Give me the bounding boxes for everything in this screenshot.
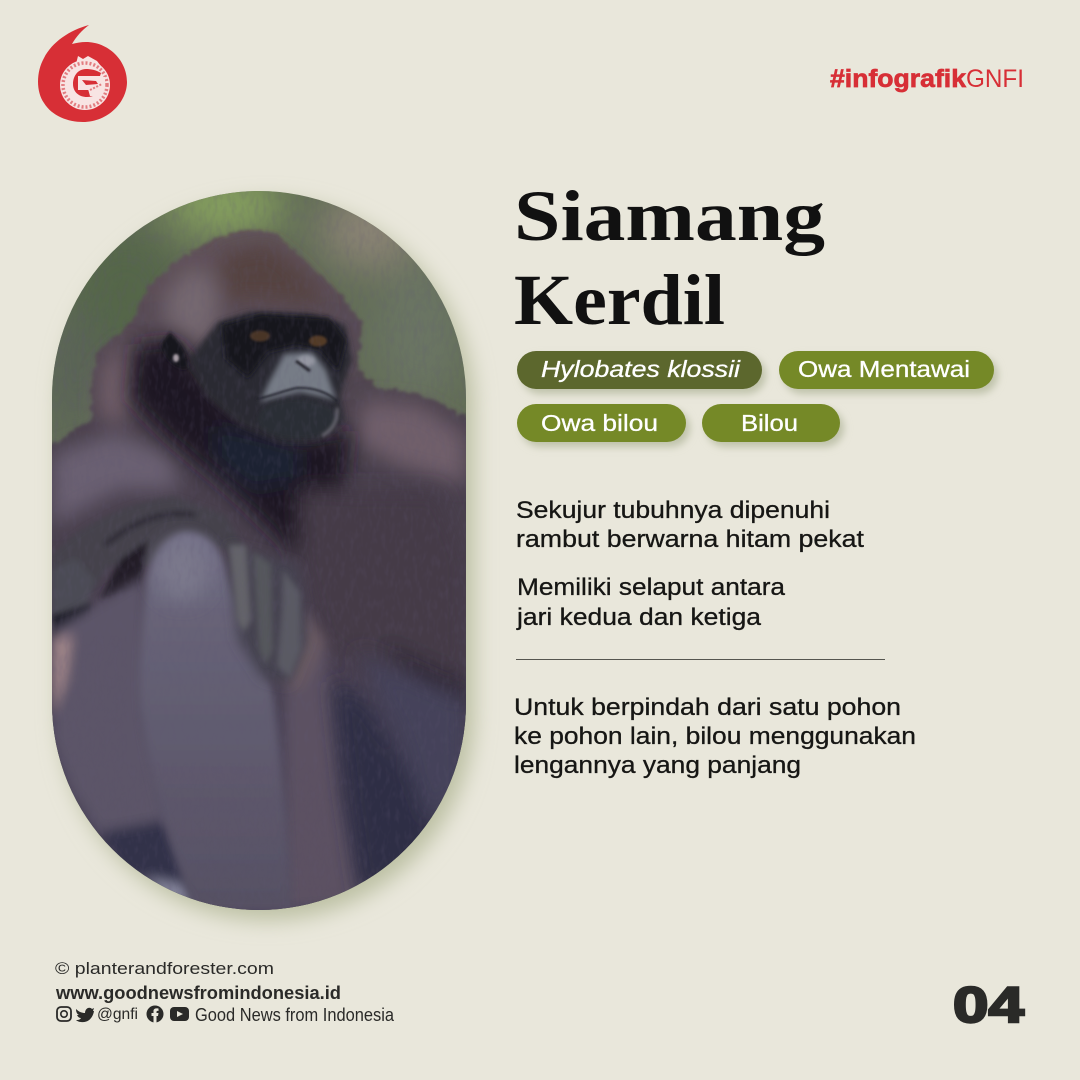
icon: facebook (146, 1006, 164, 1023)
text: fur description: rambut berwarna hitam pekat (516, 526, 864, 553)
text: movement: ke pohon lain, bilou menggunakan (514, 723, 916, 750)
footer: credits: © planterandforester.com (55, 959, 274, 978)
text: movement: lengannya yang panjang (514, 752, 801, 779)
hashtag label (830, 65, 1024, 93)
icon: youtube (170, 1007, 189, 1021)
footer: credits: www.goodnewsfromindonesia.id (55, 983, 341, 1003)
pill: Owa bilou: Owa bilou (541, 410, 658, 436)
face (160, 312, 352, 442)
pill: scientific name: Hylobates klossii (541, 356, 741, 382)
icon: twitter (76, 1008, 94, 1022)
pill: Owa Mentawai (779, 351, 998, 394)
hashtag label: #infografik (830, 65, 966, 93)
title: Siamang (514, 176, 825, 256)
text: movement (514, 694, 916, 779)
lower body (52, 575, 365, 910)
pill: Owa bilou (517, 404, 690, 447)
text: webbed fingers: jari kedua dan ketiga (516, 604, 762, 631)
folded arm (52, 500, 197, 636)
hashtag label: GNFI (966, 65, 1024, 93)
text: fur description (516, 497, 864, 553)
pill: Bilou: Bilou (741, 410, 798, 436)
gibbon body and fur (40, 229, 480, 930)
footer: credits (55, 959, 395, 1025)
pill: scientific name (517, 351, 766, 394)
footer: credits: @gnfi (97, 1006, 138, 1023)
raised knee and leg (139, 532, 292, 912)
page number: 04 (953, 977, 1024, 1033)
title (514, 176, 825, 340)
pill: Owa Mentawai: Owa Mentawai (798, 356, 970, 382)
pill: Bilou (702, 404, 844, 447)
icon: instagram (57, 1007, 71, 1021)
title: Kerdil (514, 260, 725, 340)
hand fingers (228, 545, 308, 685)
text: movement: Untuk berpindah dari satu pohon (514, 694, 901, 721)
footer: credits: Good News from Indonesia (195, 1005, 395, 1025)
photo: dwarf gibbon in capsule frame (40, 175, 480, 930)
dark neck and chest (130, 340, 466, 720)
text: webbed fingers (516, 574, 786, 631)
text: webbed fingers: Memiliki selaput antara (517, 574, 786, 601)
logo: GNFI red emblem (38, 25, 127, 122)
text: fur description: Sekujur tubuhnya dipenuhi (516, 497, 830, 524)
